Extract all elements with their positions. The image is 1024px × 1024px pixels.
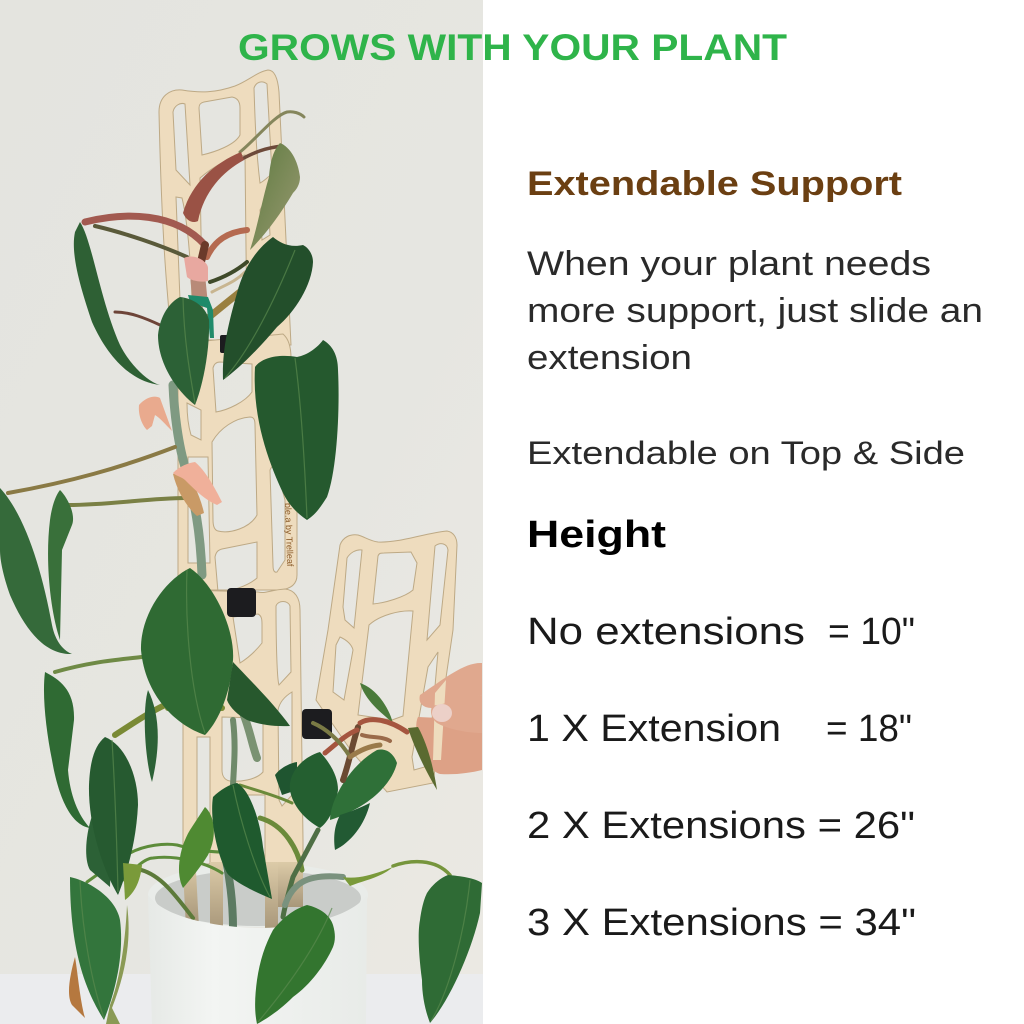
product engraving: brand marks [283,503,441,764]
plant pot: front body [148,895,367,1024]
description [527,245,983,377]
height: one extension: = 18" [826,708,912,750]
height: three extensions: 3 X Extensions = 34" [527,902,916,944]
description: more support, just slide an [527,292,983,330]
new growth: thick red petiole [183,152,244,222]
plant stems [8,112,450,918]
centre stems above side panel [313,720,407,780]
heading: extendable support: Extendable Support [527,165,902,203]
height: one extension [527,708,912,750]
description: extension [527,339,692,377]
note: extendable directions: Extendable on Top & Side [527,435,965,471]
text block: extendable support [527,165,983,471]
height: no extensions: No extensions [527,611,805,653]
height: no extensions: = 10" [828,611,915,653]
leaves [0,143,482,1024]
pink new growth sheaths [139,257,222,516]
height: one extension: 1 X Extension [527,708,781,750]
trellis: side extension panel [316,531,457,792]
height: two extensions: 2 X Extensions = 26" [527,805,915,847]
trellis: lower extension [183,589,303,864]
trellis: middle extension [178,334,297,592]
leaf midribs [80,250,470,1022]
product engraving: brand marks: by Trelleaf [430,722,441,764]
trellis: top panel [159,70,291,345]
panel: product photo [0,0,483,1024]
hand holding extension [408,663,482,790]
green plant tape [188,295,214,338]
plant pot: back and interior [148,860,368,930]
height: no extensions [527,611,915,653]
heading: height: Height [527,514,666,556]
icon: black connector clips [220,335,332,739]
description: When your plant needs [527,245,931,283]
product engraving: brand marks: ble.a by Trelleaf [283,503,295,567]
title: GROWS WITH YOUR PLANT [238,27,787,68]
height list [527,611,916,944]
